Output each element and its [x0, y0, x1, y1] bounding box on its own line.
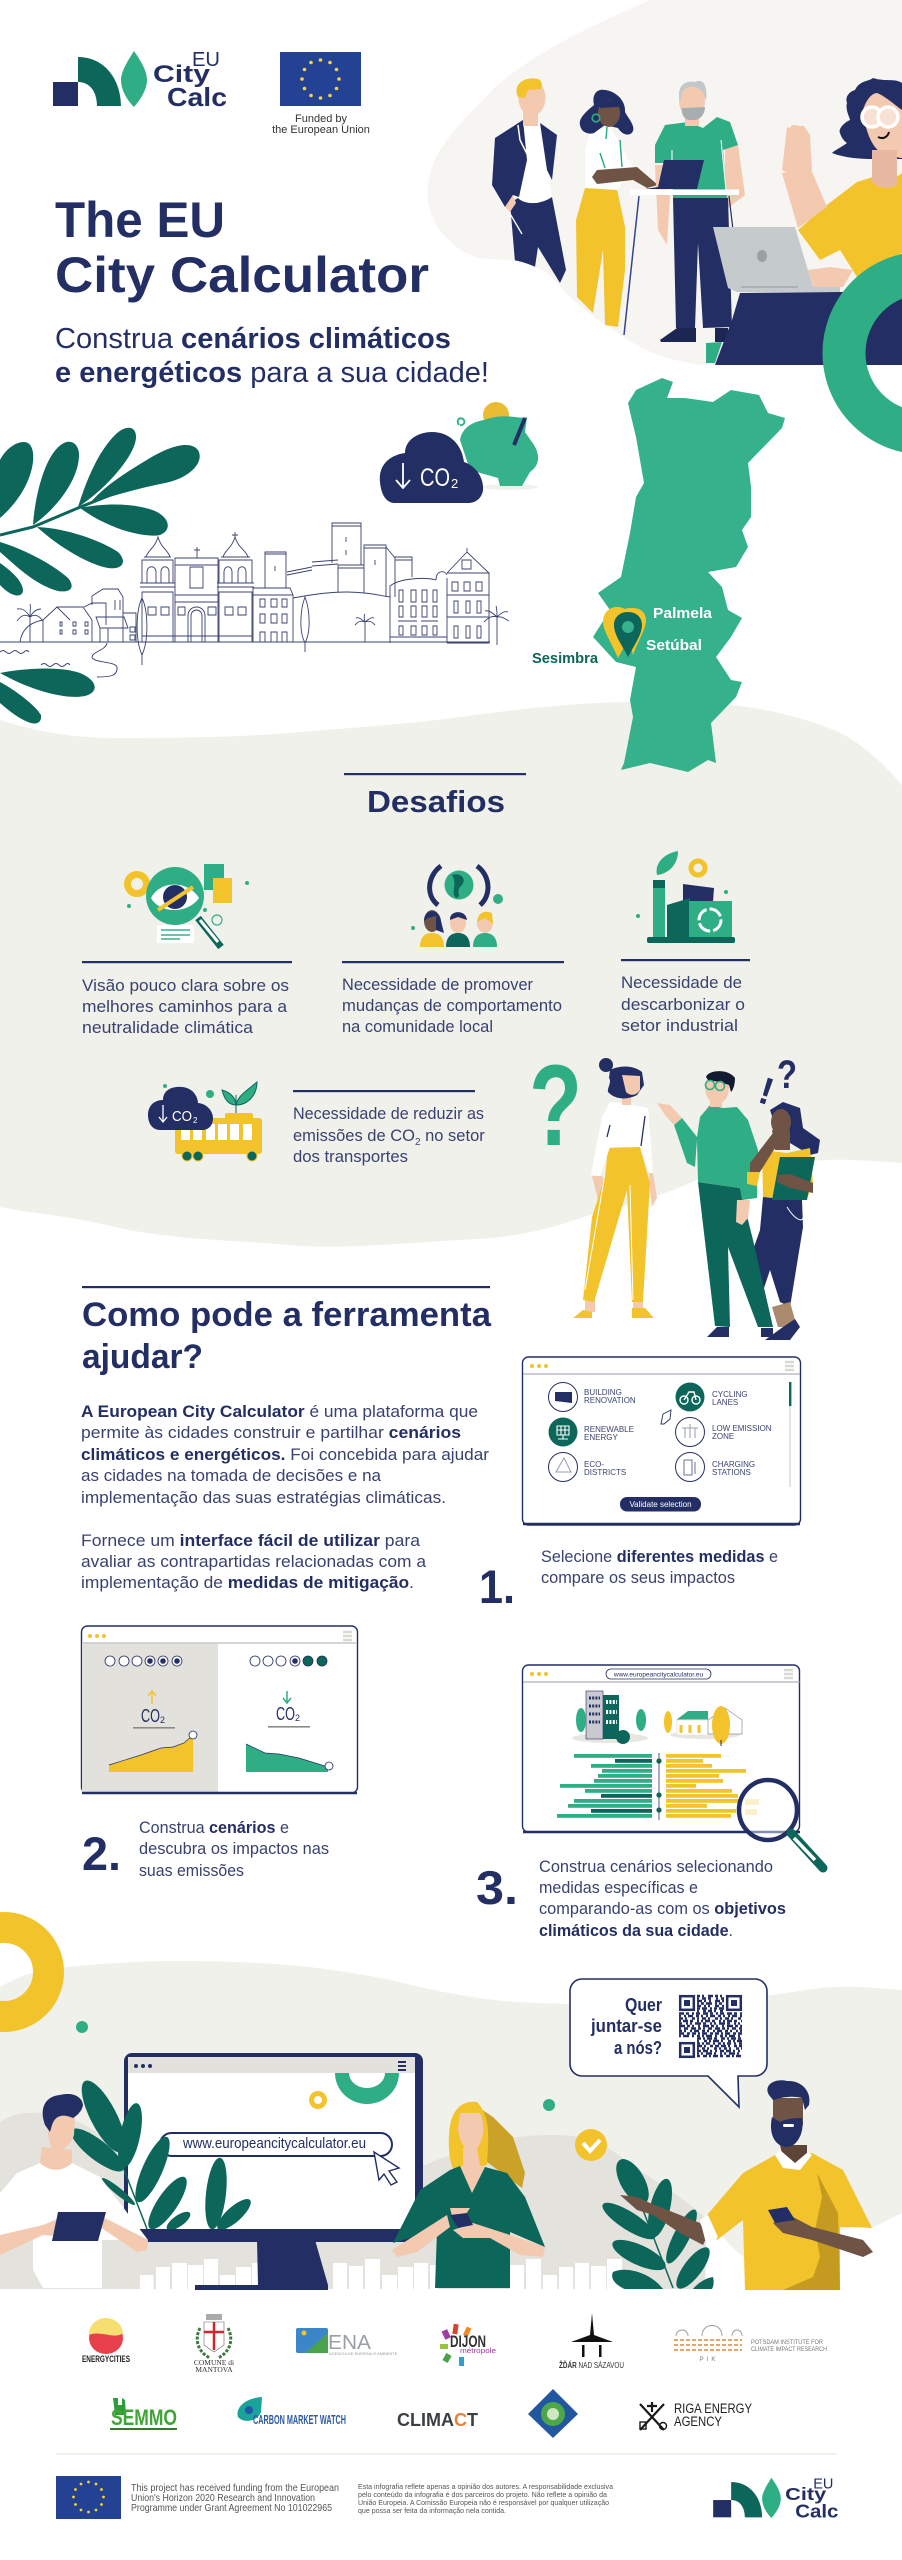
icon: factory: [636, 851, 735, 943]
map of Portugal: Setúbal: [646, 637, 702, 654]
woman right arm and folder: [747, 1133, 815, 1200]
EU City Calc logo: Calc: [167, 82, 227, 112]
validate button: [620, 1497, 701, 1512]
speech bubble with QR code: juntar-se: [590, 2016, 662, 2036]
footer funding text: Programme under Grant Agreement No 101022965: [131, 2502, 332, 2514]
step 2 text: descubra os impactos nas: [139, 1840, 329, 1858]
logo: Zdar nad Sazavou: [559, 2313, 624, 2370]
step 2 text: [82, 1819, 329, 1880]
exclamation and question marks: !: [754, 1070, 779, 1114]
speech bubble with QR code: a nós?: [614, 2038, 662, 2058]
challenge 3: industry: [621, 851, 750, 1035]
text: emissões de CO: [293, 1127, 415, 1145]
url bar: www.europeancitycalculator.eu: [182, 2136, 366, 2152]
section heading: como pode: Como pode a ferramenta: [82, 1296, 492, 1334]
measure options: RENEWABLE: [584, 1425, 634, 1434]
footer funding text: [131, 2482, 339, 2514]
EU flag with funding note: [272, 52, 370, 136]
computer monitor: [124, 2053, 423, 2290]
person: man with tablet: [0, 2094, 148, 2288]
measure options: DISTRICTS: [584, 1468, 626, 1477]
step 3 text: Construa cenários selecionando: [539, 1858, 773, 1876]
figure: bearded man with green shirt: [624, 81, 745, 342]
logo: Dijon metropole: métropole: [460, 2346, 496, 2355]
cursor: [374, 2152, 399, 2185]
logo: Riga Energy Agency: [640, 2401, 752, 2430]
text: [293, 1105, 485, 1166]
text: na comunidade local: [342, 1018, 493, 1036]
logo: Carbon Market Watch: CARBON MARKET WATCH: [253, 2412, 346, 2427]
exclamation and question marks: ?: [777, 1053, 797, 1097]
challenge 1: unclear vision: [82, 864, 292, 1037]
figure: woman with curly hair: [576, 90, 658, 327]
text: setor industrial: [621, 1017, 738, 1035]
exclamation and question marks: [754, 1053, 797, 1114]
step 3 text: comparando-as com os objetivos: [539, 1900, 786, 1918]
subtitle: e energéticos para a sua cidade!: [55, 357, 489, 389]
logo: Energy Cities: ENERGYCITIES: [82, 2354, 130, 2364]
bottom scene background: [0, 1961, 902, 2289]
person: bearded man with phone: [620, 2080, 873, 2290]
measure options: ECO-: [584, 1460, 604, 1469]
intro paragraphs: implementação de medidas de mitigação.: [81, 1573, 414, 1592]
text: Necessidade de reduzir as: [293, 1105, 484, 1123]
subtitle: [55, 323, 489, 389]
title: The EU: [55, 192, 225, 248]
logo: ENA: ENA: [328, 2332, 372, 2354]
green dots: [76, 2021, 555, 2111]
text: dos transportes: [293, 1148, 408, 1166]
measure options: ENERGY: [584, 1433, 618, 1442]
plant behind monitor: [66, 2075, 255, 2235]
logo: SEMMO: [110, 2398, 177, 2430]
logo: Zdar nad Sazavou: ŽĎÁR NAD SÁZAVOU: [559, 2361, 624, 2370]
text: [342, 976, 562, 1036]
intro paragraphs: climáticos e energéticos. Foi concebida para ajudar: [81, 1445, 489, 1464]
plant right: [598, 2154, 715, 2293]
measure options: STATIONS: [712, 1468, 751, 1477]
text: descarbonizar o: [621, 996, 745, 1014]
icon: CO2 cloud and bus: 2: [193, 1116, 198, 1125]
step 1 text: compare os seus impactos: [541, 1569, 735, 1587]
text: melhores caminhos para a: [82, 998, 288, 1016]
intro paragraphs: avaliar as contrapartidas relacionadas com a: [81, 1552, 427, 1571]
footer funding text: Union's Horizon 2020 Research and Innovation: [131, 2492, 315, 2504]
logo: Riga Energy Agency: AGENCY: [674, 2414, 722, 2429]
partner logos row 1: [82, 2313, 827, 2374]
chart-like white bars: [140, 2259, 622, 2289]
logo: PIK: CLIMATE IMPACT RESEARCH: [751, 2346, 827, 2353]
measure options: CYCLING: [712, 1390, 748, 1399]
measure options: RENOVATION: [584, 1396, 636, 1405]
text: Necessidade de promover: [342, 976, 533, 994]
measure options: CHARGING: [712, 1460, 755, 1469]
step 3 text: medidas específicas e: [539, 1879, 698, 1897]
intro paragraphs: permite às cidades construir e partilhar cenários: [81, 1423, 461, 1442]
logo: SEMMO: SEMMO: [111, 2405, 177, 2430]
footer logo: City: [785, 2484, 827, 2504]
text: 2: [415, 1137, 421, 1148]
magnifying glass: [739, 1780, 823, 1868]
map pins: [603, 607, 646, 658]
challenge 4: transport: [148, 1082, 485, 1166]
QR code: [679, 1996, 742, 2057]
step 1 text: [479, 1548, 778, 1613]
yellow ring: [0, 1928, 48, 2016]
logo: Dijon metropole: [440, 2324, 496, 2366]
intro paragraphs: Fornece um interface fácil de utilizar para: [81, 1531, 421, 1550]
logo: PIK: [674, 2326, 827, 2363]
step 2 text: suas emissões: [139, 1862, 244, 1880]
logo: regional energy agency: [528, 2389, 578, 2438]
icon: CO2 cloud and bus: [148, 1082, 262, 1161]
text: neutralidade climática: [82, 1019, 254, 1037]
logo: Comune di Mantova: MANTOVA: [195, 2365, 233, 2374]
section background: desafios: [0, 702, 902, 1247]
validate button: Validate selection: [629, 1500, 692, 1509]
text: [82, 977, 289, 1037]
person: woman with phone: [392, 2102, 545, 2288]
EU City Calc logo: [53, 49, 227, 112]
step 1 text: Selecione diferentes medidas e: [541, 1548, 778, 1566]
lower emissions: CO: [276, 1704, 295, 1724]
logo: PIK: PIK: [700, 2357, 718, 2363]
text: no setor: [421, 1127, 485, 1145]
footer disclaimer: Esta infografia reflete apenas a opinião dos autores. A responsabilidade exclusiva: [358, 2482, 614, 2491]
hero figures group clipped to blob: [492, 78, 902, 365]
EU flag with funding note: the European Union: [272, 124, 370, 136]
lower emissions: 2: [295, 1713, 300, 1723]
challenge 2: behaviour change: [342, 866, 564, 1036]
logo: Comune di Mantova: COMUNE di: [194, 2358, 234, 2367]
text: mudanças de comportamento: [342, 997, 562, 1015]
icon: globe and people: [411, 866, 503, 947]
lower emissions: [246, 1691, 333, 1772]
footer logo: Calc: [795, 2500, 838, 2521]
step 3 text: 3.: [476, 1861, 518, 1914]
figure: woman with laptop: [706, 78, 902, 365]
logo: Climact: CLIMACT: [397, 2410, 478, 2430]
heading: Desafios: Desafios: [367, 784, 505, 819]
subtitle: Construa cenários climáticos: [55, 323, 451, 355]
step 1 text: 1.: [479, 1560, 515, 1613]
title: [55, 192, 429, 303]
logo: ENA: AGENCIA DE ENERGIA E AMBIENTE: [329, 2351, 398, 2356]
text: [621, 974, 745, 1035]
text: Necessidade de: [621, 974, 742, 992]
map of Portugal: [532, 378, 785, 772]
EU City Calc logo: EU: [192, 49, 220, 71]
logo: Energy Cities: [82, 2318, 130, 2364]
footer logo: [713, 2477, 838, 2521]
check mark badge: [575, 2129, 607, 2161]
icon: piggy bank and CO2 cloud: 2: [451, 476, 458, 491]
higher emissions: [109, 1691, 197, 1772]
step 2 text: 2.: [82, 1827, 121, 1880]
footer funding text: This project has received funding from the European: [131, 2482, 339, 2494]
url pill: www.europeancitycalculator.eu: [613, 1672, 704, 1678]
icon: piggy bank and CO2 cloud: CO: [420, 464, 450, 492]
man in the middle: [657, 1071, 773, 1337]
step 2 screen mockup: [82, 1626, 358, 1793]
speech bubble with QR code: [570, 1979, 767, 2107]
EU City Calc logo: City: [153, 61, 211, 88]
icon: CO2 cloud and bus: CO: [172, 1108, 192, 1125]
logo: Dijon metropole: DIJON: [450, 2332, 486, 2351]
EU flag with funding note: Funded by: [295, 113, 347, 125]
footer disclaimer: União Europeia. A Comissão Europeia não é responsável por qualquer utilização: [358, 2498, 609, 2507]
url pill: [606, 1669, 711, 1679]
footer EU flag: [56, 2476, 121, 2519]
map of Portugal: Palmela: [653, 605, 713, 622]
intro paragraphs: implementação das suas estratégias climáticas.: [81, 1488, 446, 1507]
step 3 text: climáticos da sua cidade.: [539, 1922, 733, 1940]
hero background blob: [427, 0, 902, 365]
decorative leaves: [0, 428, 200, 724]
logo: Comune di Mantova: [194, 2314, 234, 2374]
city skyline line art: [0, 523, 509, 677]
icon: magnifier and eye: [127, 864, 249, 947]
logo: ENA: [296, 2328, 398, 2356]
green ring decoration: [844, 273, 902, 433]
logo: Carbon Market Watch: [237, 2397, 346, 2427]
step 3 screen mockup: [522, 1665, 823, 1868]
step 3 text: [476, 1858, 786, 1940]
intro paragraphs: [81, 1402, 489, 1592]
footer logo: EU: [813, 2477, 833, 2493]
map of Portugal: Sesimbra: [532, 650, 599, 667]
step 1 screen mockup: [522, 1357, 800, 1525]
monitor bottom bar: [124, 2229, 423, 2242]
partner logos row 2: [110, 2389, 752, 2438]
measure options: LOW EMISSION: [712, 1424, 772, 1433]
section heading: como pode: [82, 1286, 492, 1376]
step 2 text: Construa cenários e: [139, 1819, 289, 1837]
selection dots: [105, 1656, 327, 1666]
footer disclaimer: que possa ser feita da informação nela contida.: [358, 2506, 506, 2515]
logo: PIK: POTSDAM INSTITUTE FOR: [751, 2339, 823, 2346]
question mark: ?: [529, 1042, 582, 1170]
title: City Calculator: [55, 247, 429, 303]
measure options: BUILDING: [584, 1388, 622, 1397]
section heading: como pode: ajudar?: [82, 1338, 203, 1376]
speech bubble with QR code: Quer: [625, 1995, 662, 2015]
figure: man in suit: [492, 78, 566, 283]
woman right (behind man): [747, 1102, 820, 1340]
woman left: [573, 1058, 657, 1318]
higher emissions: 2: [160, 1715, 165, 1725]
illustration: three people wondering: [529, 1042, 820, 1340]
text: Visão pouco clara sobre os: [82, 977, 289, 995]
url bar: [160, 2133, 392, 2156]
footer disclaimer: pelo conteúdo da infografia é dos parceiros do projeto. Não reflete a opinião da: [358, 2490, 608, 2499]
measure options: LANES: [712, 1398, 738, 1407]
logo: Riga Energy Agency: RIGA ENERGY: [674, 2401, 752, 2416]
higher emissions: CO: [141, 1706, 160, 1726]
buildings illustration: [572, 1691, 742, 1746]
measure options: ZONE: [712, 1432, 734, 1441]
intro paragraphs: A European City Calculator é uma plataforma que: [81, 1402, 478, 1421]
intro paragraphs: as cidades na tomada de decisões e na: [81, 1466, 382, 1485]
diverging bars: [557, 1753, 746, 1820]
footer disclaimer: [358, 2482, 614, 2515]
measure options: [548, 1382, 772, 1482]
icon: piggy bank and CO2 cloud: [380, 402, 538, 503]
